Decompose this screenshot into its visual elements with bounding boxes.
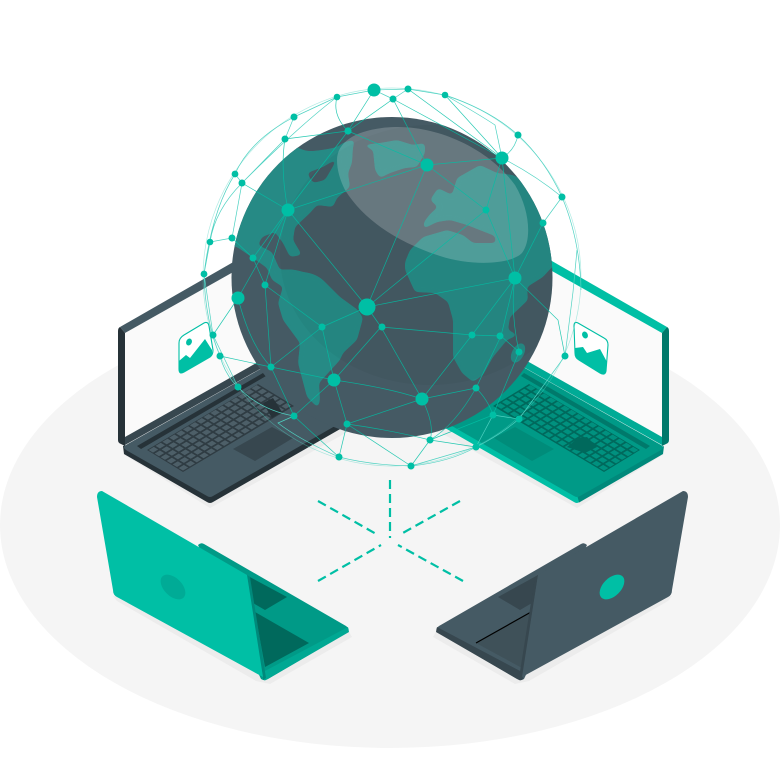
laptop: dark, top left <box>118 198 460 508</box>
trackpad <box>494 427 554 461</box>
logo ellipse <box>156 570 190 604</box>
laptop: green, top right <box>327 198 669 508</box>
network: outer sphere lines <box>203 88 581 466</box>
background floor ellipse <box>0 302 780 748</box>
globe <box>232 117 552 438</box>
highlight <box>337 127 528 263</box>
black slit line <box>476 612 531 643</box>
network: inner lines <box>213 89 565 466</box>
globe shading <box>280 125 580 385</box>
laptop: green, closed, bottom left <box>97 491 352 684</box>
logo ellipse <box>595 570 629 604</box>
dashed connector lines <box>318 480 463 581</box>
laptop: dark, closed, bottom right <box>433 491 688 684</box>
icon: picture on right screen <box>574 322 608 374</box>
icon: picture on left screen <box>179 322 213 373</box>
trackpad <box>233 427 293 461</box>
keyboard <box>147 384 294 472</box>
keyboard <box>493 384 640 472</box>
network: nodes <box>201 84 568 470</box>
continents <box>234 140 552 406</box>
